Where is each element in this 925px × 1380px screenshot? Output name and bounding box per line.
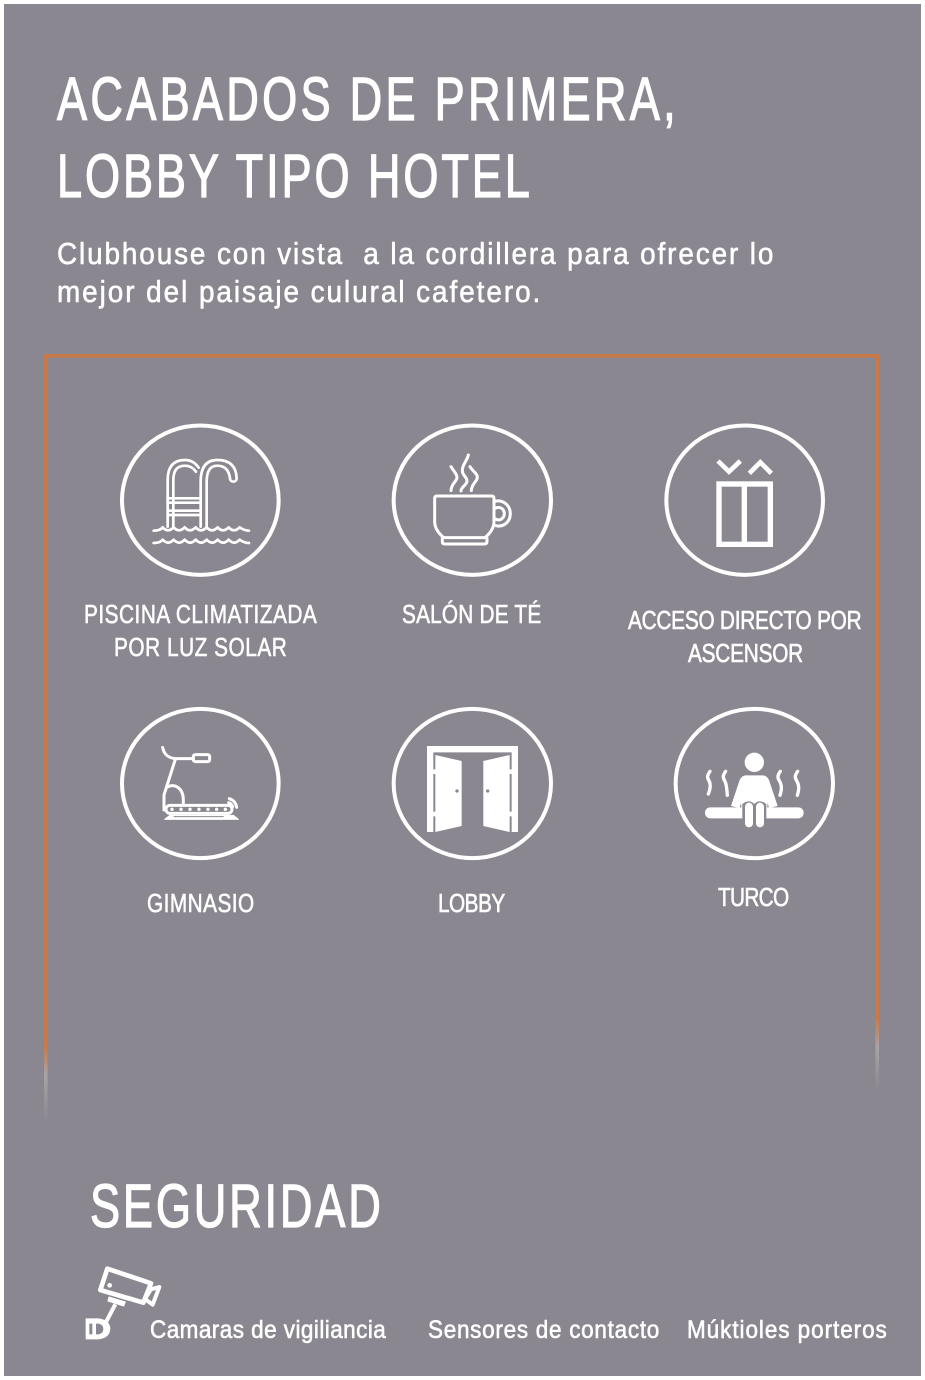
title xyxy=(57,65,676,211)
icon: tea cup xyxy=(394,425,551,575)
title: ACABADOS DE PRIMERA, xyxy=(57,65,676,134)
label: ascensor xyxy=(628,606,862,668)
label: salon de te: SALÓN DE TÉ xyxy=(402,600,541,629)
security item: sensores: Sensores de contacto xyxy=(428,1316,659,1344)
security item: porteros: Múktioles porteros xyxy=(687,1316,887,1344)
label: ascensor: ASCENSOR xyxy=(688,639,803,668)
label: piscina: PISCINA CLIMATIZADA xyxy=(84,600,317,629)
icon: steam room xyxy=(676,709,833,858)
icon: security camera xyxy=(86,1269,159,1339)
subtitle: mejor del paisaje culural cafetero. xyxy=(57,275,540,309)
icon: treadmill xyxy=(122,709,279,858)
heading: seguridad: SEGURIDAD xyxy=(90,1172,381,1241)
subtitle: Clubhouse con vista a la cordillera para ofrecer lo xyxy=(57,237,773,271)
label: lobby: LOBBY xyxy=(438,889,505,918)
subtitle xyxy=(57,237,773,309)
title: LOBBY TIPO HOTEL xyxy=(57,142,530,211)
label: turco: TURCO xyxy=(718,883,789,912)
icon: lobby doors xyxy=(394,709,551,858)
label: ascensor: ACCESO DIRECTO POR xyxy=(628,606,862,635)
panel: amenities frame xyxy=(44,354,879,1122)
label: gimnasio: GIMNASIO xyxy=(147,889,254,918)
icon: elevator xyxy=(666,425,823,575)
security item: camaras: Camaras de vigiliancia xyxy=(150,1316,387,1344)
label: piscina xyxy=(84,600,317,662)
icon: swimming pool xyxy=(122,425,279,575)
label: piscina: POR LUZ SOLAR xyxy=(114,633,287,662)
